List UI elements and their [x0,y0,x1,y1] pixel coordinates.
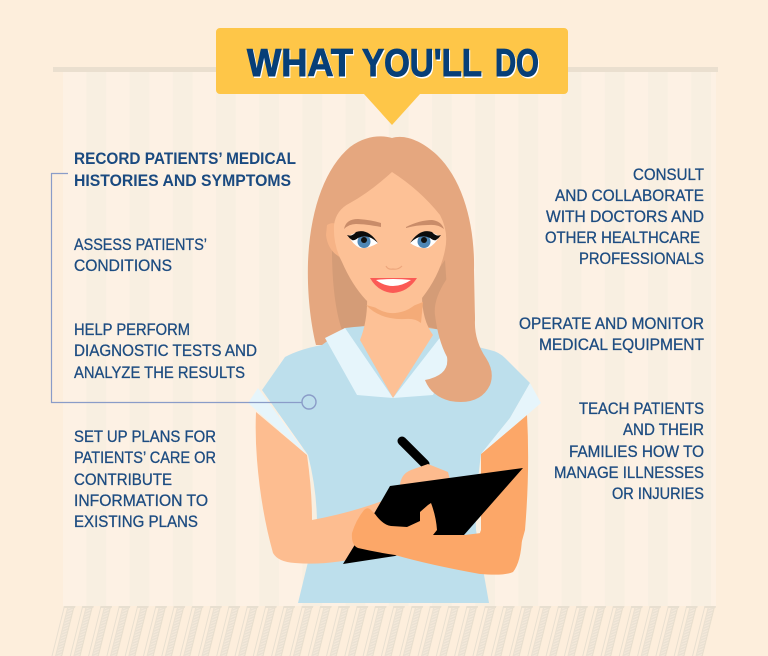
text: record histories: RECORD PATIENTS’ MEDICAL [74,150,296,168]
text: plans: PATIENTS’ CARE OR [74,449,216,467]
text: consult [545,166,704,268]
top beam [53,67,718,72]
neck [360,295,433,398]
text: diagnostic [74,321,257,382]
title banner [216,28,568,125]
text: consult: PROFESSIONALS [579,250,704,268]
text: consult: WITH DOCTORS AND [546,208,704,226]
text: diagnostic: DIAGNOSTIC TESTS AND [74,342,257,360]
right sleeve [481,383,541,454]
nose [386,266,402,269]
writing hand [400,464,450,490]
text: teach [554,400,704,503]
ear [326,223,342,258]
title: YOU'LL [363,44,483,86]
hatched floor [51,606,717,656]
text: plans: INFORMATION TO [74,492,208,510]
left collar [325,328,393,398]
nurse illustration [248,136,541,603]
connector bracket [52,174,316,409]
mouth [370,278,417,293]
text: plans: EXISTING PLANS [74,513,198,531]
text: record histories [74,150,296,190]
text: consult: AND COLLABORATE [555,187,704,205]
darker hair behind neck [332,250,447,330]
text: diagnostic: ANALYZE THE RESULTS [74,364,245,382]
text: equipment: OPERATE AND MONITOR [519,315,704,333]
text: teach: AND THEIR [623,421,704,439]
text: teach: MANAGE ILLNESSES [554,464,704,482]
teeth [376,279,411,286]
text: teach: FAMILIES HOW TO [569,443,704,461]
text: plans: CONTRIBUTE [74,471,172,489]
face [334,172,446,313]
text: consult: OTHER HEALTHCARE [545,229,700,247]
text: assess: ASSESS PATIENTS’ [74,236,207,254]
right collar [393,335,447,398]
text: teach: OR INJURIES [612,485,704,503]
clipboard [343,468,523,564]
left eye [347,231,378,248]
title: WHAT [248,44,354,86]
striped backdrop panel [63,72,716,606]
title: WHAT [247,42,353,85]
pen [402,441,425,464]
title: YOU'LL [362,42,482,85]
text: diagnostic: HELP PERFORM [74,321,190,339]
text: plans: SET UP PLANS FOR [74,428,216,446]
right eye [410,231,441,248]
text: record histories: HISTORIES AND SYMPTOMS [74,172,291,190]
right upper arm [470,415,528,570]
title: DO [495,42,539,85]
hair back [308,136,475,345]
text: assess [74,236,207,275]
right forearm and hand [352,503,522,575]
left arm [256,412,395,564]
title: DO [496,44,540,86]
left sleeve [248,388,307,455]
text: assess: CONDITIONS [74,257,172,275]
text: plans [74,428,216,531]
text: equipment: MEDICAL EQUIPMENT [539,336,704,354]
connector node [302,395,316,409]
eyebrows [344,219,381,229]
text: equipment [519,315,704,354]
text: consult: CONSULT [633,166,704,184]
neck shadow [366,302,423,323]
title [247,42,540,86]
shirt body [262,325,530,603]
text: teach: TEACH PATIENTS [579,400,704,418]
hair lock [425,240,492,402]
